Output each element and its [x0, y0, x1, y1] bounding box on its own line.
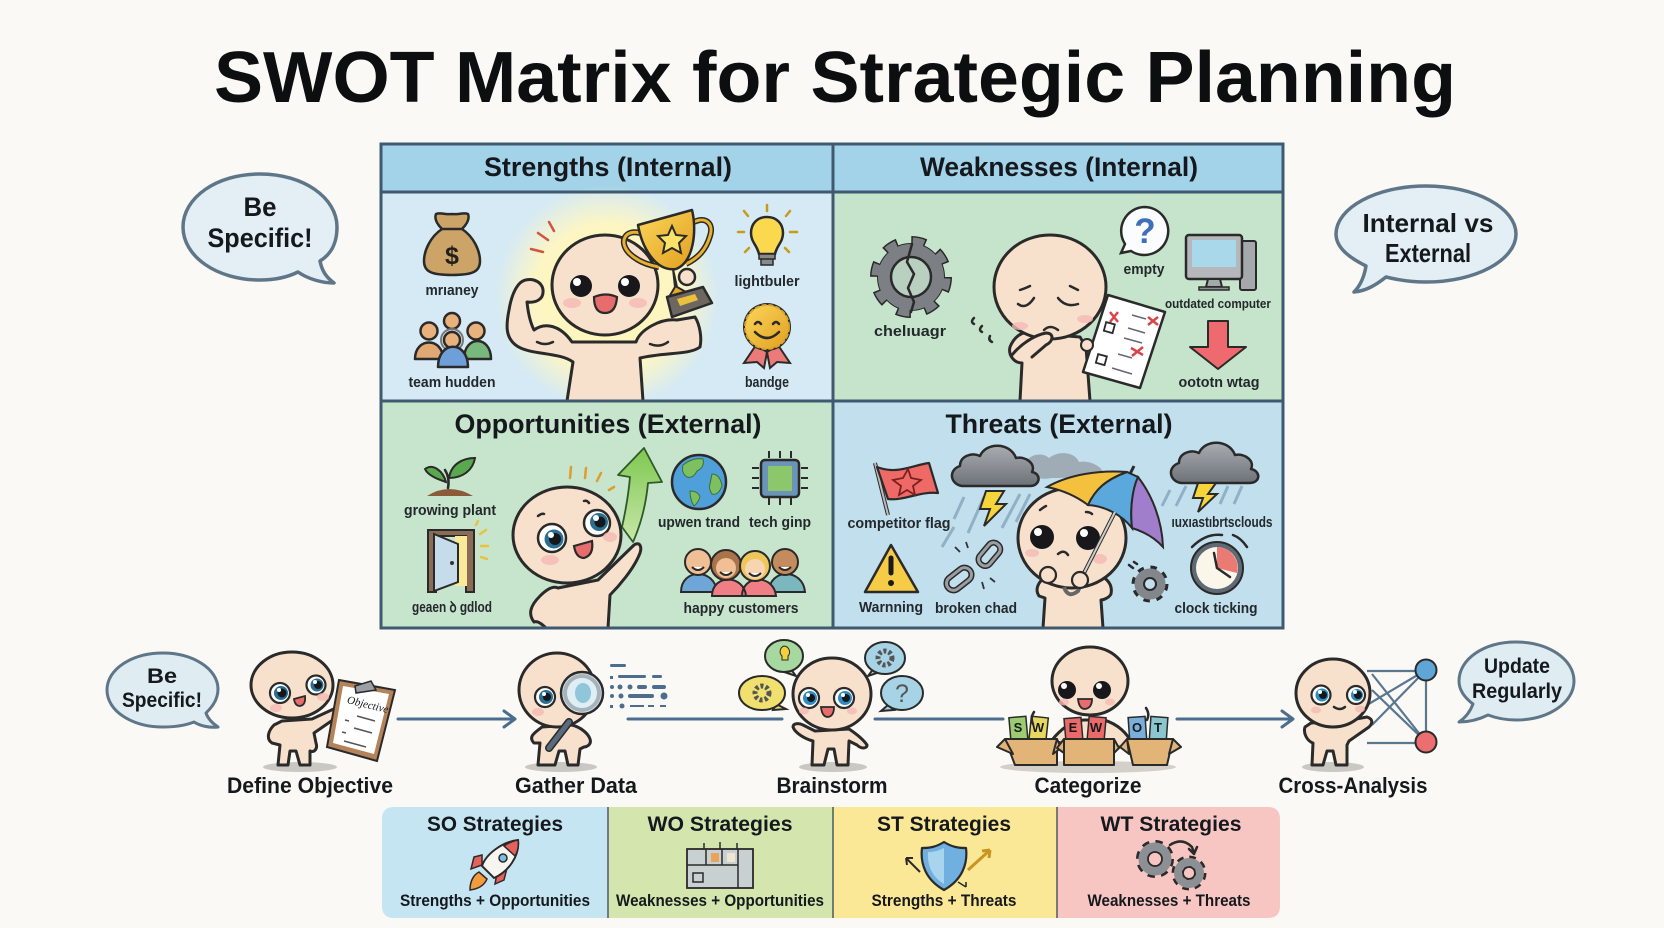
icon: small gear: [1129, 562, 1163, 597]
arrow: step 3 to 4: [875, 718, 1003, 720]
callout: be specific top: [183, 174, 337, 283]
icon: team huddle: [415, 313, 491, 367]
icon: node network: [1367, 660, 1436, 752]
strategy: WO: WO Strategies: [648, 813, 792, 836]
label: happy customers: happy customers: [684, 600, 798, 617]
panel: strengths: [381, 144, 833, 409]
icon: growing plant: [425, 458, 475, 496]
icon: idea bubbles: ?: [895, 680, 909, 708]
icon: sorting boxes: E: [1069, 720, 1078, 735]
strategy: SO: Strengths + Opportunities: [400, 891, 590, 910]
icon: question bubble: [1121, 207, 1168, 255]
icon: outdated computer: [1186, 235, 1256, 290]
strategy: WT: Weaknesses + Threats: [1088, 891, 1250, 910]
panel: strategies: [382, 807, 1280, 918]
strategy: WT: WT Strategies: [1100, 813, 1242, 836]
icon: globe: [672, 455, 726, 509]
label: upward trend: upwen trand: [658, 514, 740, 531]
icon: shield with arrows: [906, 842, 990, 890]
icon: magnifying glass: [549, 672, 603, 748]
process flow: [107, 640, 1574, 798]
icon: sorting boxes: W: [1090, 720, 1103, 735]
label: open door: ɡeaen ꝺ gdlod: [412, 599, 492, 616]
step: categorize: [997, 647, 1181, 798]
icon: sorting boxes: S: [1014, 720, 1023, 735]
step: brainstorm: [739, 640, 923, 798]
callout: internal vs external: External: [1385, 238, 1471, 268]
label: broken chain: broken chad: [935, 600, 1017, 617]
label: badge: bandge: [745, 374, 789, 391]
step: gather data: [515, 653, 668, 798]
label: lightbulb: lightbuler: [734, 273, 800, 290]
icon: broken gear: [876, 242, 946, 312]
panel: threats: [833, 401, 1283, 628]
label: categorize: Categorize: [1034, 773, 1142, 798]
label: warning: Warnning: [859, 599, 923, 616]
label: cross-analysis: Cross-Analysis: [1278, 773, 1428, 798]
arrow: step 4 to 5: [1177, 711, 1293, 727]
icon: rocket: [470, 840, 518, 890]
callout: be specific top: Be: [244, 192, 276, 222]
callout: be specific top: Specific!: [208, 223, 312, 253]
callout: update regularly: Regularly: [1472, 680, 1562, 703]
icon: trophy: [624, 210, 712, 317]
character: excited: [513, 467, 641, 628]
label: down arrow: oototn wtag: [1178, 374, 1260, 391]
icon: clipboard: [327, 680, 395, 761]
character: sad: [972, 235, 1106, 401]
icon: question bubble: ?: [1134, 212, 1156, 251]
heading: weaknesses: Weaknesses (Internal): [920, 152, 1198, 182]
strategy: SO: [382, 807, 608, 918]
matrix grid lines: [381, 144, 1283, 628]
label: money: mrıaney: [426, 282, 479, 299]
strategy: WO: [608, 807, 833, 918]
icon: warning triangle: [865, 545, 918, 592]
label: gather data: Gather Data: [515, 773, 638, 798]
icon: checklist paper: [1081, 295, 1165, 388]
callout: internal vs external: [1336, 186, 1516, 292]
icon: gears: [1142, 841, 1201, 885]
label: brainstorm: Brainstorm: [776, 773, 888, 798]
glow: [495, 185, 719, 409]
icon: upward arrow: [618, 448, 662, 542]
icon: sorting boxes: W: [1032, 720, 1045, 735]
callout: internal vs external: Internal vs: [1362, 208, 1494, 238]
callout: update regularly: [1459, 642, 1574, 722]
arrow: step 2 to 3: [628, 718, 782, 720]
icon: idea bubbles: [739, 640, 923, 711]
label: broken gear: chelıuagr: [874, 323, 946, 340]
icon: data rows: [610, 664, 668, 708]
icon: clock ticking: [1191, 535, 1247, 594]
label: define objective: Define Objective: [227, 773, 393, 798]
icon: open door: [428, 521, 488, 592]
strategy: ST: Strengths + Threats: [872, 891, 1016, 910]
icon: red down arrow: [1190, 321, 1246, 369]
icon: money bag: $: [445, 242, 459, 270]
callout: be specific lower: [107, 653, 218, 727]
icon: clouds and lightning: [1162, 443, 1258, 512]
label: competitor flag: competitor flag: [848, 515, 950, 532]
panel: weaknesses: [833, 144, 1283, 401]
title: SWOT Matrix for Strategic Planning: [214, 38, 1456, 118]
step: define objective: [227, 652, 395, 798]
callout: update regularly: Update: [1484, 655, 1550, 678]
label: outdated computer: outdated computer: [1165, 296, 1271, 311]
label: empty: empty: [1124, 261, 1165, 278]
step: cross-analysis: [1278, 659, 1436, 798]
strategy: ST: ST Strategies: [877, 813, 1011, 836]
heading: opportunities: Opportunities (External): [454, 409, 762, 439]
icon: tech chip: [752, 451, 808, 505]
icon: lightbulb: [738, 205, 797, 265]
callout: be specific lower: Specific!: [122, 689, 202, 712]
icon: clipboard: Objective: [346, 694, 390, 716]
icon: sorting boxes: [997, 708, 1181, 765]
icon: broken chain: [944, 540, 1003, 593]
icon: sorting boxes: T: [1154, 720, 1162, 735]
label: team huddle: team hudden: [408, 374, 496, 391]
arrow: step 1 to 2: [398, 711, 515, 727]
label: growing plant: growing plant: [404, 502, 496, 519]
icon: badge: [743, 303, 791, 368]
strategy: SO: SO Strategies: [427, 813, 563, 836]
icon: planning board: [687, 842, 753, 888]
strategy: ST: [833, 807, 1057, 918]
icon: competitor flag: [875, 463, 938, 515]
strategy: WT: [1057, 807, 1280, 918]
label: clock ticking: clock ticking: [1174, 600, 1258, 617]
label: tech chip: tech ginp: [749, 514, 811, 531]
icon: money bag: [424, 213, 480, 275]
icon: umbrella: [1040, 466, 1163, 594]
strategy: WO: Weaknesses + Opportunities: [616, 891, 824, 910]
panel: SWOT matrix: [381, 144, 1283, 628]
character: worried with umbrella: [1018, 488, 1126, 628]
heading: threats: Threats (External): [946, 409, 1172, 439]
character: strong: [507, 222, 701, 401]
heading: strengths: Strengths (Internal): [484, 152, 732, 182]
label: thunderclouds: ıuxıastıbrtsclouds: [1172, 514, 1272, 531]
icon: happy customers: [681, 549, 805, 596]
icon: storm cloud: [942, 446, 1039, 547]
icon: background cloud: [1024, 453, 1103, 479]
icon: sorting boxes: O: [1132, 720, 1142, 735]
panel: opportunities: [381, 401, 833, 628]
callout: be specific lower: Be: [147, 665, 177, 688]
